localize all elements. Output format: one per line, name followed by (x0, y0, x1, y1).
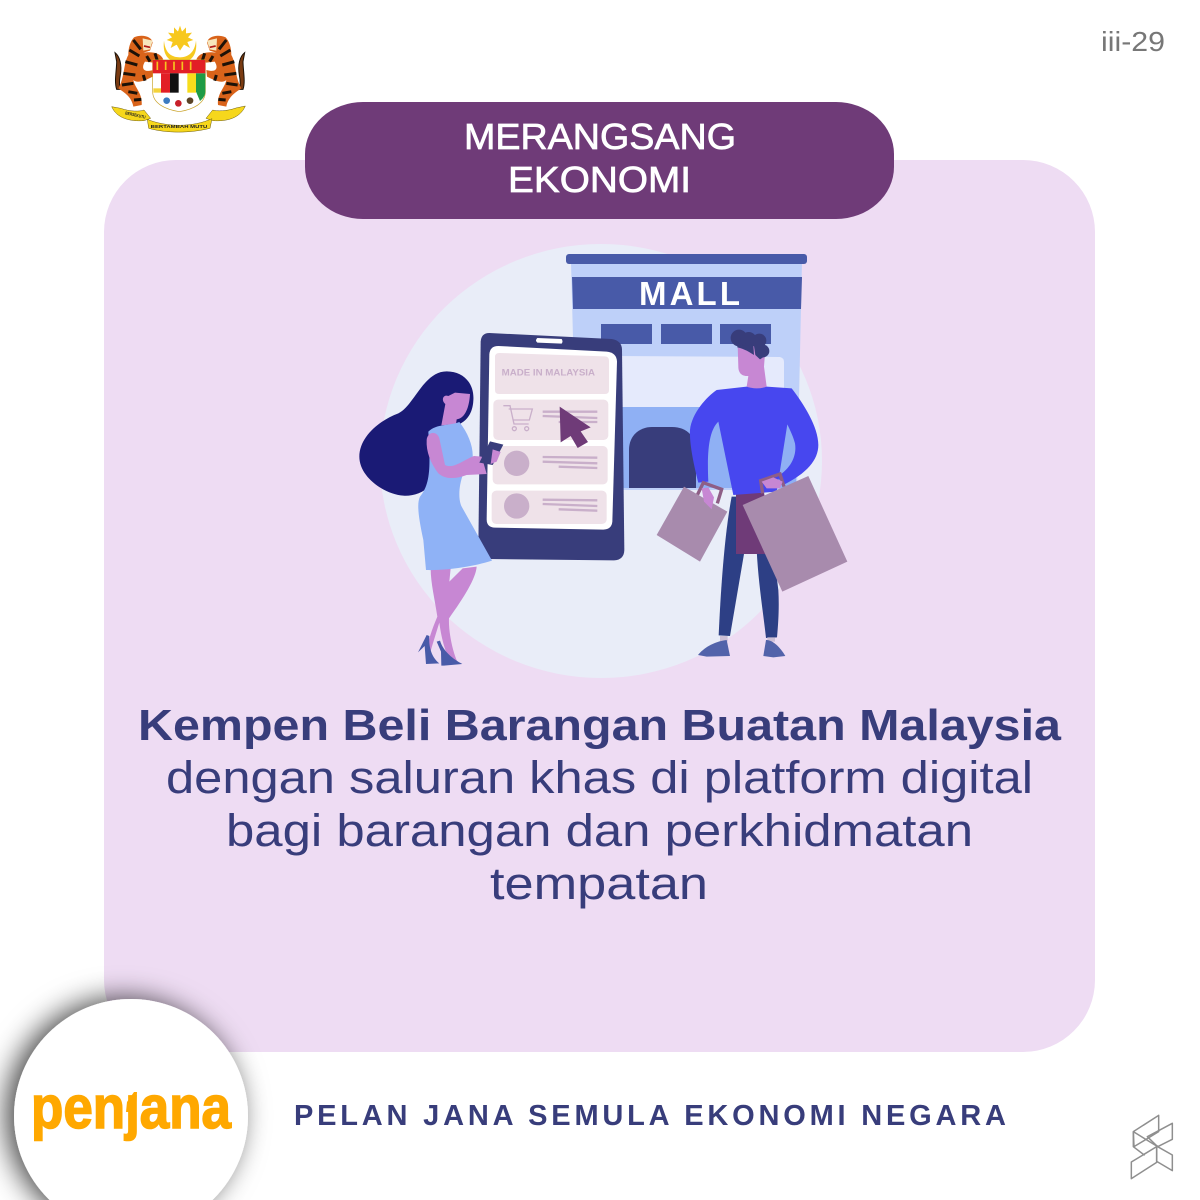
heels (418, 635, 462, 666)
mall sign: MALL (639, 275, 740, 312)
neck and face (738, 343, 767, 389)
small shopping bag (657, 487, 727, 562)
description: bagi barangan dan perkhidmatan (226, 805, 973, 856)
man figure (657, 330, 847, 657)
made in Malaysia card: MADE IN MALAYSIA (502, 367, 596, 377)
motto ribbon (112, 106, 245, 132)
woman figure (359, 371, 503, 666)
cursor arrow (560, 407, 591, 448)
heading pill (305, 102, 894, 219)
description: tempatan (490, 858, 708, 909)
left tiger (115, 36, 163, 107)
body text (138, 701, 1062, 909)
motto ribbon: BERSEKUTU (125, 110, 146, 120)
hand (491, 449, 501, 464)
right tiger (196, 36, 245, 107)
dress (418, 422, 492, 570)
page number: iii-29 (1101, 26, 1165, 57)
footer text: PELAN JANA SEMULA EKONOMI NEGARA (294, 1100, 1006, 1132)
sweater (690, 387, 818, 495)
mall door (629, 427, 696, 488)
bag handles (697, 474, 784, 503)
penjana logo badge (14, 999, 248, 1200)
shield (153, 60, 205, 112)
mall windows (601, 324, 771, 344)
icon: publisher mark (1131, 1115, 1172, 1179)
description (166, 752, 1033, 909)
main panel (104, 160, 1095, 1052)
legs (426, 567, 477, 662)
hair (359, 371, 473, 496)
trousers (719, 497, 779, 638)
illustration: shopping scene (359, 244, 847, 678)
heading text: EKONOMI (508, 159, 691, 200)
crescent and sun (164, 26, 196, 63)
mall building (566, 254, 807, 490)
heading text (464, 116, 736, 200)
phone with shopping app (478, 333, 624, 560)
hair (731, 330, 769, 359)
apron panel (736, 493, 775, 554)
socks and shoes (698, 636, 785, 657)
icon: Malaysia coat of arms (112, 26, 245, 132)
face (441, 393, 470, 425)
list card (493, 446, 608, 484)
large shopping bag (743, 476, 847, 592)
background circle (380, 244, 822, 678)
bold headline: Kempen Beli Barangan Buatan Malaysia (138, 701, 1062, 750)
cart card (493, 400, 608, 440)
list card (492, 491, 607, 524)
penjana wordmark: penjana (31, 1074, 232, 1141)
motto ribbon: BERTAMBAH MUTU (151, 124, 207, 129)
handheld phone (479, 441, 503, 465)
description: dengan saluran khas di platform digital (166, 752, 1033, 803)
hands (702, 477, 783, 509)
heading text: MERANGSANG (464, 116, 736, 157)
made in Malaysia card (495, 353, 609, 394)
arm (427, 433, 487, 478)
